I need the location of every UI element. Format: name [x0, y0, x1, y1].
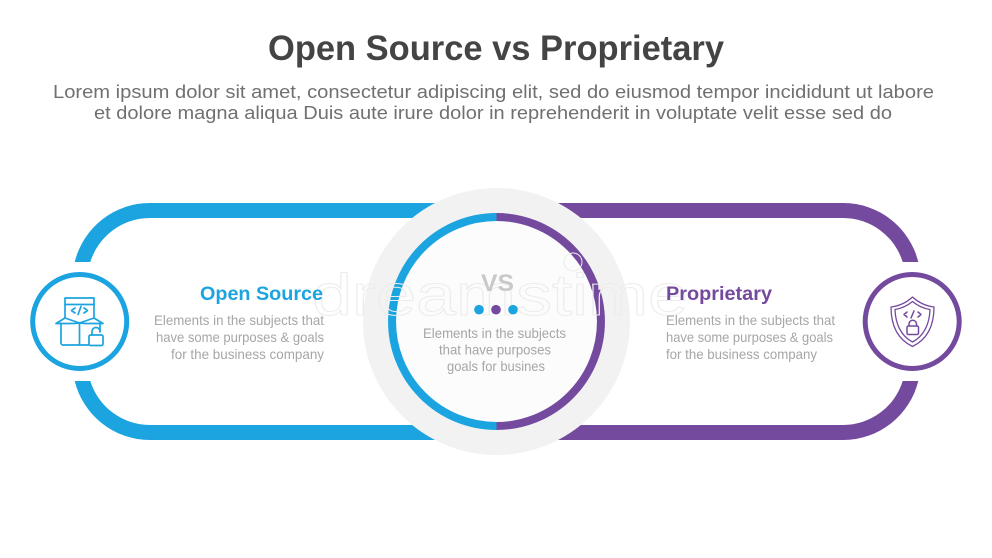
panel: proprietary track — [550, 203, 918, 440]
right icon circle — [865, 274, 959, 368]
left body text — [154, 312, 324, 362]
description text: et dolore magna aliqua Duis aute irure dolor in reprehenderit in voluptate velit esse sed do — [94, 102, 892, 123]
left body text: have some purposes & goals — [156, 329, 324, 345]
center body text: Elements in the subjects — [423, 325, 566, 341]
right body text: for the business company — [666, 346, 817, 362]
left body text: Elements in the subjects that — [154, 312, 324, 328]
left body text: for the business company — [171, 346, 324, 362]
center body text: goals for busines — [447, 358, 545, 374]
center gray disc — [363, 188, 630, 455]
panel: open source track — [75, 203, 440, 440]
VS label: VS — [481, 270, 514, 297]
icon: shield with lock — [891, 297, 934, 346]
watermark — [312, 253, 688, 328]
description text: Lorem ipsum dolor sit amet, consectetur adipiscing elit, sed do eiusmod tempor incididunt ut labore — [53, 81, 934, 102]
three dots — [474, 305, 518, 315]
center white circle — [392, 216, 602, 426]
right body text — [666, 312, 835, 362]
right body text: have some purposes & goals — [666, 329, 833, 345]
title: Open Source vs Proprietary — [268, 29, 725, 68]
left heading: Open Source — [200, 284, 323, 305]
center body text — [423, 325, 566, 374]
center ring: blue half — [392, 217, 496, 426]
right heading: Proprietary — [666, 284, 772, 305]
icon: open source box — [56, 298, 103, 346]
description text — [53, 81, 934, 123]
center ring: purple half — [496, 217, 601, 426]
watermark: dreamstime — [312, 263, 688, 328]
center body text: that have purposes — [439, 342, 551, 358]
right body text: Elements in the subjects that — [666, 312, 835, 328]
left icon circle — [33, 274, 127, 368]
